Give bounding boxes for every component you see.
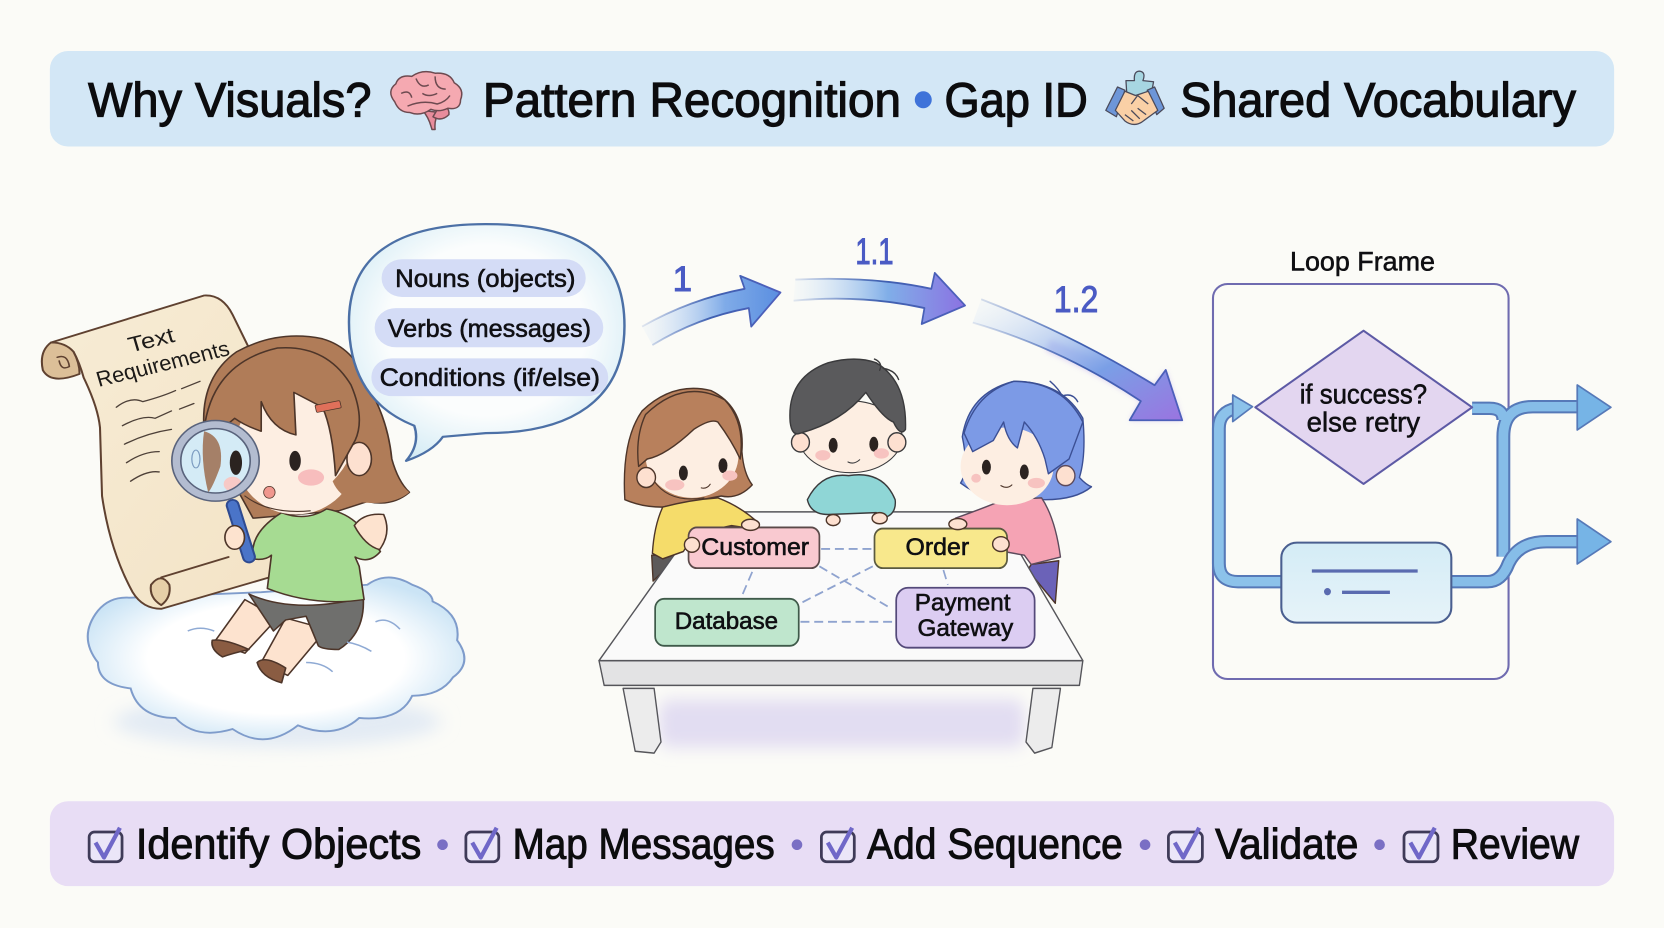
dot xyxy=(437,839,448,850)
card: order: Order xyxy=(905,533,969,560)
table xyxy=(599,512,1083,753)
arrow head: success exit xyxy=(1577,385,1611,430)
dot xyxy=(1140,839,1150,850)
hair seen through lens xyxy=(203,431,221,492)
decision diamond: if success? xyxy=(1300,379,1427,409)
banner background xyxy=(50,51,1614,146)
eye xyxy=(289,451,301,471)
raised hand xyxy=(354,514,387,550)
separator dot xyxy=(915,91,932,108)
dot xyxy=(1374,839,1385,850)
icon: brain xyxy=(391,72,462,129)
checkbox 5 xyxy=(1404,828,1438,862)
panel: team at table xyxy=(599,359,1091,753)
label: 1: 1 xyxy=(673,260,692,299)
speech bubble xyxy=(349,224,624,461)
cloud xyxy=(88,577,464,739)
checkbox 3 xyxy=(821,828,854,862)
decision diamond xyxy=(1255,331,1472,484)
scroll xyxy=(42,295,286,609)
card: database xyxy=(655,599,799,646)
bubble shape xyxy=(349,224,624,461)
arrow head: retry xyxy=(1233,395,1253,422)
step: map messages: Map Messages xyxy=(513,821,775,868)
card: customer: Customer xyxy=(701,533,809,560)
card: payment gateway: Gateway xyxy=(918,614,1013,641)
icon: handshake with puzzle piece xyxy=(1106,71,1164,124)
pill: conditions: Conditions (if/else) xyxy=(380,363,600,392)
panel: requirements reader xyxy=(42,224,624,748)
pill: verbs: Verbs (messages) xyxy=(388,314,591,343)
scroll title: requirements: Requirements xyxy=(93,336,232,391)
shoes xyxy=(212,640,249,657)
checkbox 4 xyxy=(1168,828,1202,862)
sweater xyxy=(253,509,380,602)
hair front xyxy=(204,348,359,476)
magnifier handle xyxy=(233,505,249,557)
hand on handle xyxy=(225,526,244,549)
label: 1.1: 1.1 xyxy=(855,230,894,272)
card: customer xyxy=(689,527,819,568)
shorts xyxy=(249,594,363,650)
card: database: Database xyxy=(675,607,778,634)
card: payment gateway: Payment xyxy=(915,589,1011,616)
pill: nouns xyxy=(382,259,586,297)
arrow head: retry exit xyxy=(1577,519,1611,564)
scroll title: text: Text xyxy=(125,323,178,357)
step: review: Review xyxy=(1451,821,1579,868)
checkbox 2 xyxy=(466,828,499,862)
step: validate: Validate xyxy=(1215,821,1358,868)
kid: black hair xyxy=(790,359,906,526)
card: payment gateway xyxy=(896,588,1035,648)
heading: gap id: Gap ID xyxy=(944,75,1088,128)
arrow: message 1.1 xyxy=(794,273,965,324)
legs xyxy=(214,600,278,653)
lens ring xyxy=(176,425,255,497)
pipe: success exit xyxy=(1472,407,1580,557)
heading: shared vocabulary: Shared Vocabulary xyxy=(1180,75,1576,128)
shadow under table xyxy=(659,699,1024,748)
girl character xyxy=(173,336,409,683)
pill: nouns: Nouns (objects) xyxy=(395,264,575,293)
arrow: message 1 xyxy=(642,276,780,345)
pipe: retry loop xyxy=(1219,408,1283,582)
heading: pattern recognition: Pattern Recognition xyxy=(483,75,901,128)
kid legs behind table xyxy=(652,555,1059,603)
cloud shadow xyxy=(114,696,441,748)
arrow: message 1.2 xyxy=(973,299,1182,420)
decision diamond: else retry xyxy=(1307,407,1420,438)
connector dashes xyxy=(742,549,948,622)
pill: verbs xyxy=(375,308,603,347)
heading: why visuals: Why Visuals? xyxy=(88,75,371,128)
hair clip xyxy=(315,401,341,413)
scroll scribble lines xyxy=(116,381,200,481)
checkbox 1 xyxy=(89,828,122,862)
checklist banner xyxy=(50,801,1614,886)
lens xyxy=(173,421,258,501)
dot xyxy=(792,839,802,850)
hair back xyxy=(204,336,409,518)
cloud creases xyxy=(188,620,400,672)
blush xyxy=(298,469,324,486)
action box xyxy=(1281,543,1451,623)
face xyxy=(234,389,358,514)
checklist background xyxy=(50,801,1614,886)
hair strand right xyxy=(333,385,409,503)
ear xyxy=(347,442,371,476)
hands on cards xyxy=(684,519,1009,552)
label: 1.2: 1.2 xyxy=(1054,278,1098,320)
step: add sequence: Add Sequence xyxy=(867,821,1123,868)
kid: brown hair xyxy=(624,388,759,559)
pipe: retry exit xyxy=(1450,542,1580,582)
loop frame border xyxy=(1213,284,1509,679)
step: identify objects: Identify Objects xyxy=(136,821,421,868)
card: order xyxy=(874,529,1007,568)
mouth xyxy=(264,486,275,498)
header banner xyxy=(50,51,1614,146)
lens glint xyxy=(192,450,200,468)
kid: blue hair xyxy=(955,381,1091,564)
panel: loop frame diagram xyxy=(1213,246,1611,679)
loop frame title: Loop Frame xyxy=(1290,246,1435,277)
